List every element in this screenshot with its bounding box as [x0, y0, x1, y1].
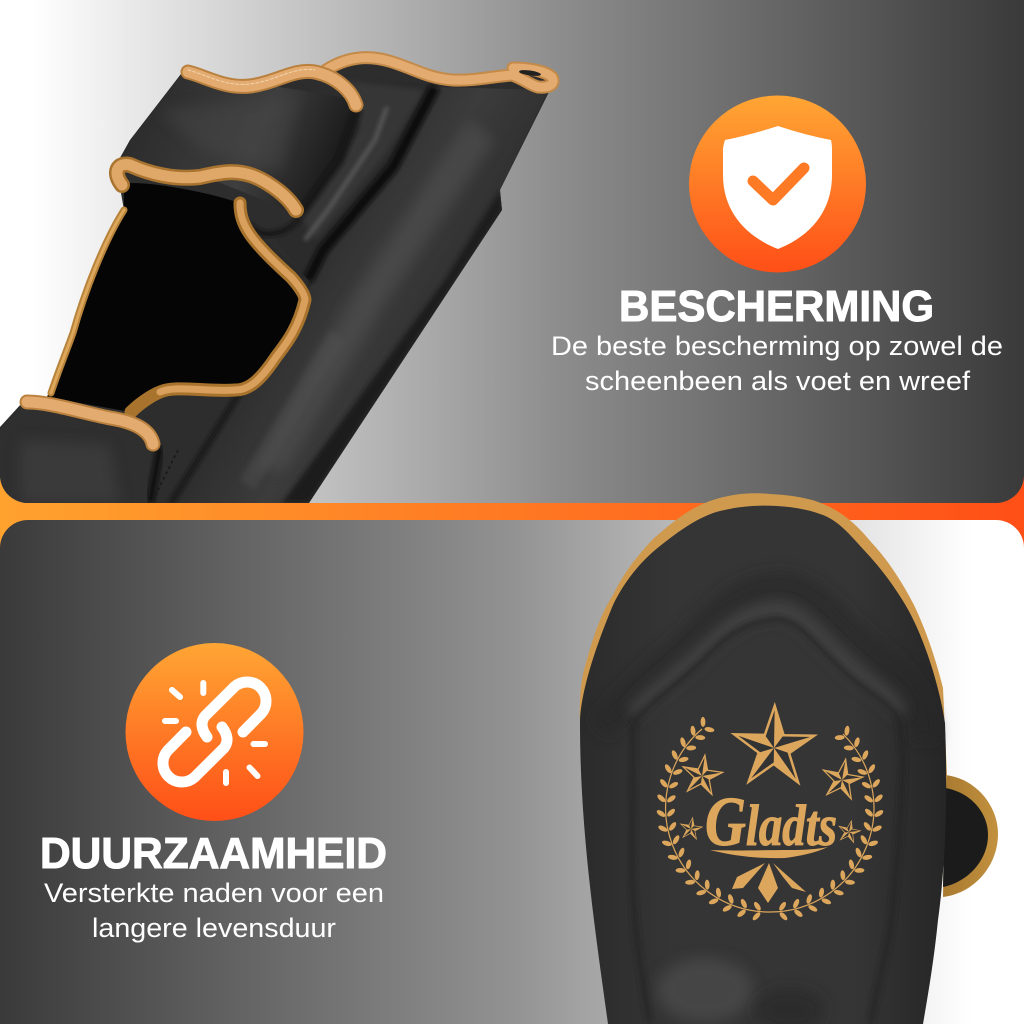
orange band background [0, 440, 1024, 580]
panel: bescherming [0, 0, 1024, 510]
logo: Gladts wordmark: Gladts [705, 784, 837, 861]
panel: duurzaamheid [0, 520, 1024, 1024]
text: duurzaamheid description: Versterkte naden voor een [44, 878, 384, 908]
shin opening [47, 183, 305, 412]
text: bescherming description: De beste bescherming op zowel de [551, 331, 1003, 361]
heading: bescherming: BESCHERMING [619, 282, 934, 331]
logo: stars [679, 705, 865, 843]
text: duurzaamheid description [44, 878, 384, 943]
foot guard body [580, 506, 946, 1024]
icon: shield [689, 96, 866, 272]
foot guard photo [580, 493, 998, 1024]
text: bescherming description [551, 331, 1003, 396]
gold rim [580, 493, 947, 1024]
gold trim [27, 58, 553, 444]
text: bescherming description: scheenbeen als voet en wreef [585, 366, 971, 396]
side tab [943, 775, 998, 897]
logo: chevrons [732, 863, 806, 903]
shin guard photo [0, 50, 560, 510]
icon: broken chain [126, 643, 304, 821]
heading: duurzaamheid: DUURZAAMHEID [40, 829, 387, 878]
molded ridge [600, 585, 925, 1024]
logo: wreath [655, 715, 885, 922]
text: duurzaamheid description: langere levensduur [92, 913, 336, 943]
